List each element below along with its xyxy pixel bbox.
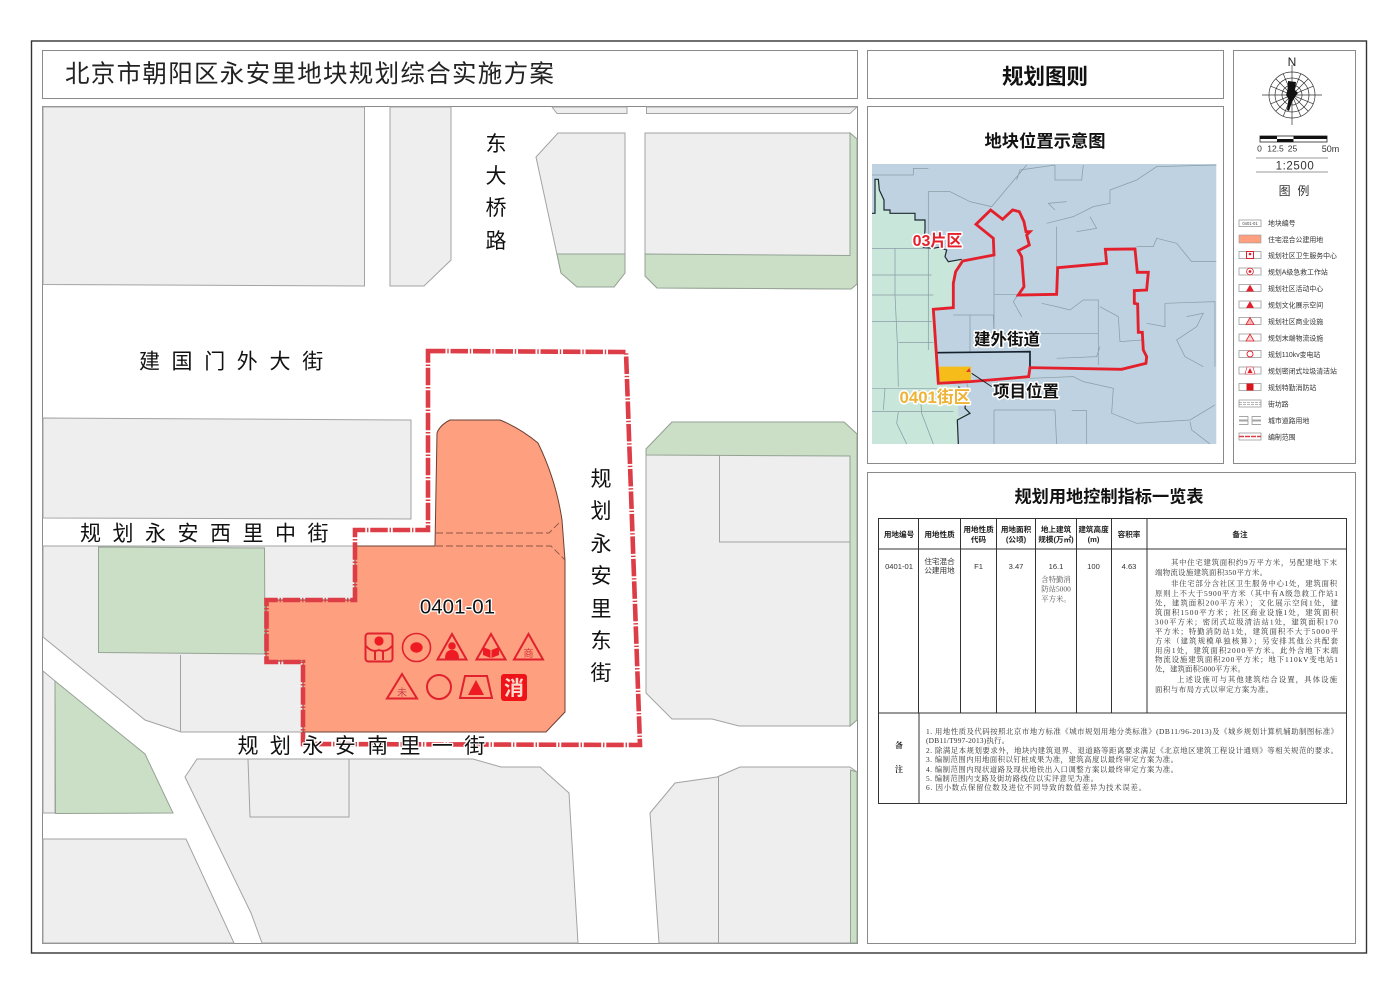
remarks text block: 方米（建筑规模单独核算）；另安排其他公共配套: [1155, 636, 1339, 646]
legend item: substation: 规划110kv变电站: [1268, 350, 1320, 359]
notes text block: 1. 用地性质及代码按照北京市地方标准《城市规划用地分类标准》(DB11/96-2013)及《城乡规划计算机辅助制图标准》: [926, 727, 1338, 736]
road label: 规划永安里东街: 安: [590, 565, 612, 588]
legend item: parcel code: [1239, 218, 1296, 228]
notes label: 备: [895, 740, 903, 750]
road label: 规划永安里东街: 永: [590, 533, 612, 556]
remarks text block: 物流设施建筑面积200平方米；地下110kV变电站1: [1155, 655, 1338, 664]
map label: 0401街区: 0401街区: [900, 388, 971, 407]
notes label: 注: [895, 764, 903, 774]
road label: 建国门外大街: 建国门外大街: [139, 350, 323, 374]
table header row: 代码: [971, 535, 986, 544]
notes text block: 5. 编制范围内支路及街坊路线位以实评意见为准。: [926, 774, 1098, 783]
legend item: community health: 规划社区卫生服务中心: [1268, 251, 1337, 260]
scale bar: 0: [1257, 144, 1262, 154]
map label: 项目位置: 项目位置: [993, 381, 1059, 401]
table header row: 规模(万㎡): [1038, 534, 1074, 544]
scale bar: [1257, 136, 1339, 154]
notes text block: 2. 除满足本规划要求外，地块内建筑退界、退道路等距离要求满足《北京地区建筑工程设计通则》等相关规范的要求。: [926, 746, 1338, 756]
table header row: 备注: [1232, 529, 1248, 539]
icon: community commerce: 商: [524, 647, 534, 660]
panel: legend and compass: [1234, 50, 1356, 464]
legend item: mixed residential land: [1239, 235, 1323, 244]
remarks text block: 端物流设施建筑面积350平方米。: [1155, 568, 1267, 577]
surrounding blocks: [43, 107, 857, 943]
scale bar: 12.5: [1267, 144, 1284, 154]
table data row: F1: [974, 562, 983, 571]
panel: land control table: [868, 472, 1356, 944]
icon: community activity centre: [438, 634, 466, 660]
legend item: parcel code: 地块编号: [1268, 218, 1296, 228]
table header row: (m): [1088, 535, 1100, 544]
icon: fire station: 消: [504, 677, 524, 700]
road label: 东大桥路: 东: [486, 133, 506, 156]
legend item: urban road land: [1239, 416, 1309, 425]
panel: location map: [868, 106, 1224, 464]
map scale ratio: [1256, 158, 1328, 172]
map label: 建外街道: 建外街道: [974, 329, 1040, 349]
table header row: 用地面积: [1001, 524, 1032, 534]
road label: 规划永安里东街: 街: [590, 662, 612, 685]
icon: A-level first aid station: [402, 634, 430, 662]
legend item: planning boundary: 编制范围: [1268, 432, 1296, 442]
table data row: 平方米。: [1041, 594, 1071, 604]
road label: 规划永安西里中街: 规划永安西里中街: [80, 522, 328, 546]
legend item: community commerce: 规划社区商业设施: [1268, 317, 1323, 326]
icon: end-point logistics: [387, 674, 417, 699]
scale bar: 50m: [1322, 144, 1339, 154]
legend item: neighbourhood road: [1239, 400, 1289, 408]
table data row: 防站5000: [1041, 584, 1071, 594]
road label: 规划永安里东街: 里: [590, 598, 612, 621]
title panel: 北京市朝阳区永安里地块规划综合实施方案: [65, 60, 555, 88]
icon: community commerce: [514, 634, 543, 660]
table header row: 地上建筑: [1041, 524, 1072, 534]
legend item: logistics: 规划末端物流设施: [1268, 334, 1323, 342]
legend item: logistics: [1239, 334, 1323, 342]
remarks text block: 筑面积1500平方米；社区商业设施1处，建筑面积: [1155, 608, 1339, 618]
legend item: community commerce: [1239, 317, 1323, 326]
table header row: [884, 524, 1248, 544]
remarks text block: [1155, 558, 1339, 694]
legend item: refuse station: 规划密闭式垃圾清洁站: [1268, 366, 1337, 376]
table data row: 3.47: [1009, 562, 1023, 571]
table data row: [885, 556, 1136, 604]
legend item: first aid: 规划A级急救工作站: [1268, 268, 1328, 276]
notes text block: [926, 727, 1338, 792]
legend item: first aid: [1239, 268, 1328, 276]
legend item: urban road land: 城市道路用地: [1268, 416, 1309, 425]
panel: plan title: 规划图则: [1002, 65, 1088, 89]
remarks text block: 300平方米；密闭式垃圾清洁站1处，建筑面积170: [1155, 618, 1338, 628]
icon: fire station: [501, 674, 527, 701]
remarks text block: 平方米；特勤消防站1处，建筑面积不大于5000平: [1155, 627, 1339, 637]
legend item: culture exhibition: 规划文化展示空间: [1268, 300, 1323, 310]
remarks text block: 上述设施可与其他建筑结合设置，具体设施: [1177, 675, 1338, 685]
heading: table title: 规划用地控制指标一览表: [1014, 486, 1204, 506]
table header row: 用地编号: [884, 529, 915, 539]
remarks text block: 处，建筑面积5000平方米。: [1155, 664, 1245, 674]
remarks text block: 面积与布局方式以审定方案为准。: [1155, 685, 1273, 694]
legend item: neighbourhood road: 街坊路: [1268, 400, 1289, 408]
table data row: 住宅混合: [924, 556, 955, 566]
legend item: fire station: [1239, 383, 1316, 392]
table grid: [878, 518, 1347, 804]
legend item: culture exhibition: [1239, 300, 1323, 310]
table header row: 容积率: [1118, 529, 1141, 539]
icon: community health centre: [366, 634, 392, 662]
land parcel 0401-01: [266, 420, 565, 732]
legend item: fire station: 规划特勤消防站: [1268, 383, 1316, 392]
scale bar: 25: [1288, 144, 1297, 154]
road label: 东大桥路: 桥: [486, 197, 506, 220]
icon: culture exhibition space: [476, 634, 506, 660]
location map graphic: [872, 164, 1216, 444]
table header row: 建筑高度: [1078, 524, 1109, 534]
road label: 东大桥路: 路: [486, 230, 506, 253]
table data row: 0401-01: [885, 562, 913, 571]
planning boundary dashed line: [266, 351, 640, 745]
legend item: parcel code: 0401-01: [1242, 221, 1258, 226]
remarks text block: 原则上不大于5900平方米（其中有A级急救工作站1: [1155, 589, 1338, 598]
legend item: community activity: 规划社区活动中心: [1268, 284, 1323, 293]
notes text block: 4. 编制范围内现状道路及现状地铁出入口调整方案以最终审定方案为准。: [926, 765, 1178, 774]
icon: end-point logistics: 未: [397, 687, 407, 699]
road label: 规划永安里东街: 规: [590, 468, 612, 491]
panel: plan title: [868, 50, 1224, 98]
parcel code label: 0401-01: [420, 596, 495, 618]
table data row: 公建用地: [924, 565, 955, 575]
table header row: 用地性质: [963, 524, 994, 534]
table header row: (公顷): [1006, 535, 1027, 544]
icon: closed refuse station: [460, 676, 492, 698]
legend item: community activity: [1239, 284, 1323, 293]
table data row: 含特勤消: [1041, 575, 1071, 584]
legend item: substation: [1239, 350, 1320, 359]
legend item: mixed residential land: 住宅混合公建用地: [1268, 235, 1323, 244]
remarks text block: 用房1处，建筑面积2000平方米。此外含地下末端: [1155, 646, 1339, 656]
icon: 110kV substation: [427, 675, 451, 699]
legend item: planning boundary: [1239, 432, 1296, 442]
heading: location map: 地块位置示意图: [985, 131, 1105, 151]
table data row: 4.63: [1122, 562, 1136, 571]
legend item: community health: [1239, 251, 1337, 260]
compass rose: N: [1288, 55, 1296, 69]
road label: 规划永安里东街: 东: [590, 630, 612, 653]
legend heading: 图 例: [1279, 184, 1309, 198]
notes text block: 6. 因小数点保留位数及进位不同导致的数值差异为技术误差。: [926, 783, 1146, 792]
table data row: 100: [1087, 562, 1100, 571]
panel: planning site map: [42, 106, 858, 944]
remarks text block: 非住宅部分含社区卫生服务中心1处，建筑面积: [1171, 579, 1338, 589]
table header row: 用地性质: [924, 529, 955, 539]
notes text block: 3. 编制范围内用地面积以钉桩成果为准，建筑高度以最终审定方案为准。: [926, 755, 1178, 765]
legend item: refuse station: [1239, 366, 1337, 376]
compass rose: [1262, 55, 1322, 125]
notes text block: (DB11/T997-2013)执行。: [926, 736, 1009, 745]
remarks text block: 处，建筑面积200平方米）；文化展示空间1处，建: [1155, 598, 1339, 608]
map scale ratio: 1:2500: [1276, 160, 1314, 172]
road label: 规划永安南里一街: 规划永安南里一街: [238, 735, 485, 758]
road label: 东大桥路: 大: [486, 165, 506, 188]
road label: 规划永安里东街: 划: [590, 500, 612, 523]
map label: 03片区: 03片区: [913, 232, 962, 250]
remarks text block: 其中住宅建筑面积约9万平方米，另配建地下末: [1171, 558, 1338, 568]
title panel: [42, 50, 858, 98]
green spaces: [55, 133, 857, 943]
table data row: 16.1: [1049, 562, 1063, 571]
